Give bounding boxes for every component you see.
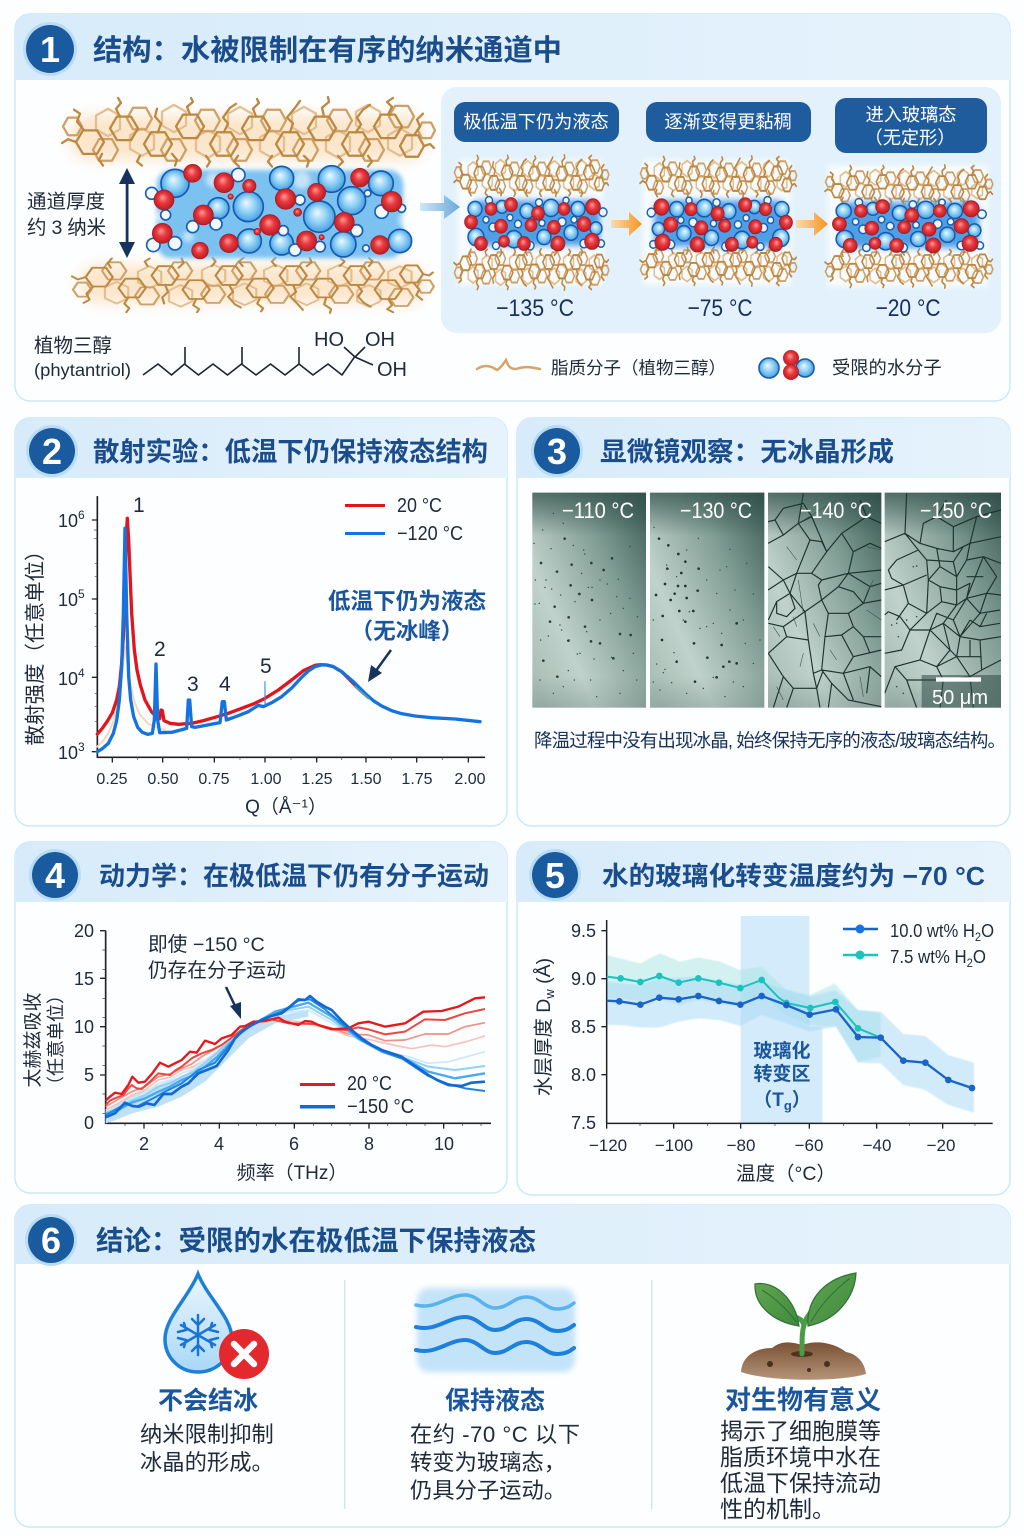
state label 1: 极低温下仍为液态 [463, 112, 609, 132]
panel 6: conclusions [15, 1205, 1010, 1527]
temperature labels [562, 498, 992, 523]
x tick labels [96, 771, 486, 788]
curves [100, 931, 491, 1129]
badge 2: 2 [42, 431, 62, 472]
phytantriol skeletal formula [143, 329, 407, 381]
conclusion 2 text [410, 1422, 580, 1503]
panel 3: microscopy [517, 418, 1010, 826]
x tick labels [589, 1136, 955, 1155]
micrograph -130 [650, 493, 764, 708]
y axis titles: 太赫兹吸收 [22, 992, 44, 1088]
water molecules [146, 164, 412, 259]
orange arrow 2 [796, 212, 828, 236]
peak labels: 2 [154, 638, 166, 661]
plot [601, 916, 993, 1129]
y axis titles: （任意单位） [46, 986, 66, 1094]
conclusion 1 title: 不会结冰 [158, 1387, 258, 1415]
x axis title: 温度（°C） [736, 1163, 836, 1185]
state label 3 [835, 98, 987, 153]
band label [753, 1040, 811, 1113]
badge 3: 3 [547, 431, 567, 472]
badge 5 [529, 849, 581, 901]
badge 4: 4 [45, 855, 65, 896]
badge 6: 6 [41, 1220, 61, 1261]
band label: （T [753, 1090, 784, 1111]
badge 6 [25, 1214, 77, 1266]
heading 4: 动力学：在极低温下仍有分子运动 [99, 861, 489, 891]
band label: ） [792, 1089, 811, 1111]
conclusion 3 text: 脂质环境中水在 [720, 1444, 881, 1470]
icon: water waves [416, 1288, 575, 1372]
orange arrow 1 [611, 212, 642, 236]
y tick labels: 20 [74, 921, 94, 941]
x axis title: 频率（THz） [237, 1162, 347, 1184]
badge 5: 5 [545, 855, 565, 896]
temperature -135: −135 °C [496, 295, 574, 322]
micrograph -140 [768, 493, 881, 708]
scene: -135 C [454, 155, 609, 290]
molecule name: 植物三醇 [34, 335, 112, 357]
heading 2: 散射实验：低温下仍保持液态结构 [93, 437, 488, 467]
y tick labels [571, 921, 596, 1133]
badge 3 [531, 425, 583, 477]
y tick labels: 15 [74, 969, 94, 989]
legend [345, 495, 463, 545]
x tick labels: −60 [795, 1136, 823, 1155]
scale box [922, 675, 1001, 708]
y tick labels: 7.5 [571, 1113, 596, 1133]
y tick labels: 9.0 [571, 969, 596, 989]
x tick labels: 1.50 [350, 771, 382, 788]
legend: O [973, 947, 986, 967]
panel 1: structure [15, 14, 1010, 401]
annotation [328, 589, 486, 682]
x tick labels: 0.25 [96, 771, 128, 788]
x tick labels: 0.50 [147, 771, 179, 788]
y tick labels: 10 [58, 590, 78, 610]
scale label: 50 μm [932, 687, 988, 709]
y tick labels: 8.0 [571, 1065, 596, 1085]
band label: 玻璃化 [753, 1040, 811, 1062]
molecule name [34, 335, 131, 380]
temperature labels: −150 °C [920, 498, 992, 523]
y tick labels: 0 [84, 1113, 94, 1133]
y axis title: 散射强度（任意单位） [24, 540, 47, 746]
y tick labels: 4 [78, 666, 85, 680]
annotation: 即使 −150 °C [148, 934, 265, 956]
annotation: 仍存在分子运动 [148, 960, 286, 982]
large channel illustration [62, 97, 435, 313]
scene: -20 C [825, 165, 993, 288]
x tick labels: 2.00 [454, 771, 486, 788]
conclusion 2 text: 在约 -70 °C 以下 [410, 1422, 580, 1447]
state label 3: （无定形） [865, 128, 955, 148]
channel thickness label [27, 191, 106, 239]
divider [651, 1280, 652, 1509]
y tick labels [58, 508, 85, 763]
thickness chart [532, 916, 994, 1185]
conclusion 2 text: 仍具分子运动。 [410, 1478, 566, 1503]
x tick labels [139, 1134, 454, 1154]
x tick labels: −100 [655, 1136, 693, 1155]
x tick labels: 1.75 [401, 771, 433, 788]
temperature labels: −130 °C [680, 498, 752, 523]
conclusion 1 text: 冰晶的形成。 [140, 1450, 274, 1475]
micrograph -150 [885, 493, 1001, 708]
x tick labels: −20 [927, 1136, 955, 1155]
x tick labels: −120 [589, 1136, 627, 1155]
y tick labels: 10 [58, 743, 78, 763]
y tick labels: 10 [58, 511, 78, 531]
scattering chart [24, 494, 486, 818]
peak labels: 1 [133, 494, 145, 517]
peak labels: 4 [219, 673, 231, 696]
y axis title: (Å) [532, 958, 555, 989]
phytantriol skeletal formula: HO [314, 329, 344, 351]
micrographs [532, 493, 1001, 708]
legend: 7.5 wt% H [890, 947, 972, 967]
conclusion 1 text [140, 1422, 274, 1475]
y axis title: w [542, 989, 557, 1000]
temperature -20: −20 °C [876, 295, 940, 322]
x tick labels: −40 [863, 1136, 891, 1155]
legend: water [759, 350, 942, 380]
x tick labels: 2 [139, 1134, 149, 1154]
x tick labels: −80 [727, 1136, 755, 1155]
legend [843, 921, 994, 970]
legend: −120 °C [397, 523, 463, 545]
channel thickness arrow [119, 168, 135, 258]
legend: 2 [975, 930, 981, 944]
legend: O [981, 921, 994, 941]
peak labels: 5 [260, 655, 272, 678]
legend: 2 [967, 956, 973, 970]
scene: -75 C [640, 156, 797, 286]
y axis title: 水层厚度 D [533, 999, 555, 1096]
heading 3: 显微镜观察：无冰晶形成 [600, 437, 894, 467]
annotation: 低温下仍为液态 [328, 589, 486, 614]
conclusion 3 text [720, 1418, 881, 1522]
conclusion 3 title: 对生物有意义 [725, 1385, 881, 1415]
temperature -75: −75 °C [688, 295, 752, 322]
state label 2: 逐渐变得更黏稠 [664, 112, 792, 132]
blue arrow to inset [420, 195, 460, 219]
panel 4: dynamics [15, 842, 507, 1193]
badge 2 [26, 425, 78, 477]
heading 5: 水的玻璃化转变温度约为 −70 °C [602, 861, 985, 891]
heading 1: 结构：水被限制在有序的纳米通道中 [93, 34, 562, 67]
badge 1 [23, 22, 77, 76]
x tick labels: 8 [364, 1134, 374, 1154]
divider [344, 1280, 346, 1509]
glass transition band [741, 916, 822, 1123]
legend: lipid: 脂质分子（植物三醇） [551, 358, 726, 378]
icon: seedling [741, 1273, 866, 1380]
legend: 20 °C [347, 1073, 392, 1095]
x tick labels: 4 [214, 1134, 224, 1154]
panel 5: glass transition [517, 842, 1010, 1195]
temperature labels: −140 °C [800, 498, 872, 523]
y tick labels: 10 [58, 669, 78, 689]
channel thickness label: 约 3 纳米 [27, 217, 106, 239]
state label 3: 进入玻璃态 [866, 105, 956, 125]
peak labels: 3 [187, 673, 199, 696]
state label 1 [454, 102, 619, 142]
annotation: （无冰峰） [351, 619, 463, 644]
badge 4 [29, 849, 81, 901]
y tick labels: 5 [78, 587, 85, 601]
y tick labels [74, 921, 94, 1133]
temperature labels: −110 °C [562, 498, 634, 523]
band label: g [784, 1098, 792, 1113]
peak labels [133, 494, 272, 696]
phytantriol skeletal formula: OH [377, 359, 407, 381]
state label 2 [646, 102, 811, 142]
x tick labels: 1.00 [250, 771, 282, 788]
inset: temperature series [441, 87, 1001, 333]
conclusion 3 text: 揭示了细胞膜等 [720, 1418, 881, 1444]
terahertz chart [22, 921, 491, 1184]
caption: 降温过程中没有出现冰晶, 始终保持无序的液态/玻璃态结构。 [534, 730, 1006, 751]
y tick labels: 5 [84, 1065, 94, 1085]
conclusion 2 text: 转变为玻璃态， [410, 1450, 566, 1475]
heading 6: 结论：受限的水在极低温下保持液态 [96, 1225, 536, 1256]
conclusion 2 title: 保持液态 [445, 1387, 545, 1415]
annotation [148, 934, 286, 1019]
y tick labels: 10 [74, 1017, 94, 1037]
micrograph -110 [532, 493, 646, 708]
legend: 10.0 wt% H [890, 921, 982, 941]
badge 1: 1 [40, 29, 60, 70]
x axis title: Q（Å⁻¹） [245, 796, 327, 818]
y tick labels: 8.5 [571, 1017, 596, 1037]
phytantriol skeletal formula: OH [365, 329, 395, 351]
conclusion 1 text: 纳米限制抑制 [140, 1422, 274, 1447]
legend [300, 1073, 414, 1118]
y axis titles [22, 986, 66, 1094]
x tick labels: 0.75 [198, 771, 230, 788]
legend: −150 °C [347, 1096, 414, 1118]
x tick labels: 10 [434, 1134, 454, 1154]
legend: 20 °C [397, 495, 442, 517]
x tick labels: 6 [289, 1134, 299, 1154]
y tick labels: 3 [78, 740, 85, 754]
conclusion 3 text: 低温下保持流动 [720, 1470, 881, 1496]
band label: 转变区 [753, 1062, 811, 1085]
y tick labels: 6 [78, 508, 85, 522]
y tick labels: 9.5 [571, 921, 596, 941]
curves [92, 497, 484, 762]
shaded band [106, 1010, 308, 1123]
legend: water: 受限的水分子 [832, 357, 942, 378]
channel thickness label: 通道厚度 [27, 191, 105, 213]
panel 2: scattering [15, 418, 507, 826]
x tick labels: 1.25 [301, 771, 333, 788]
molecule name: (phytantriol) [34, 360, 131, 380]
icon: droplet with snowflake and cross [165, 1274, 269, 1379]
conclusion 3 text: 性的机制。 [720, 1496, 835, 1522]
